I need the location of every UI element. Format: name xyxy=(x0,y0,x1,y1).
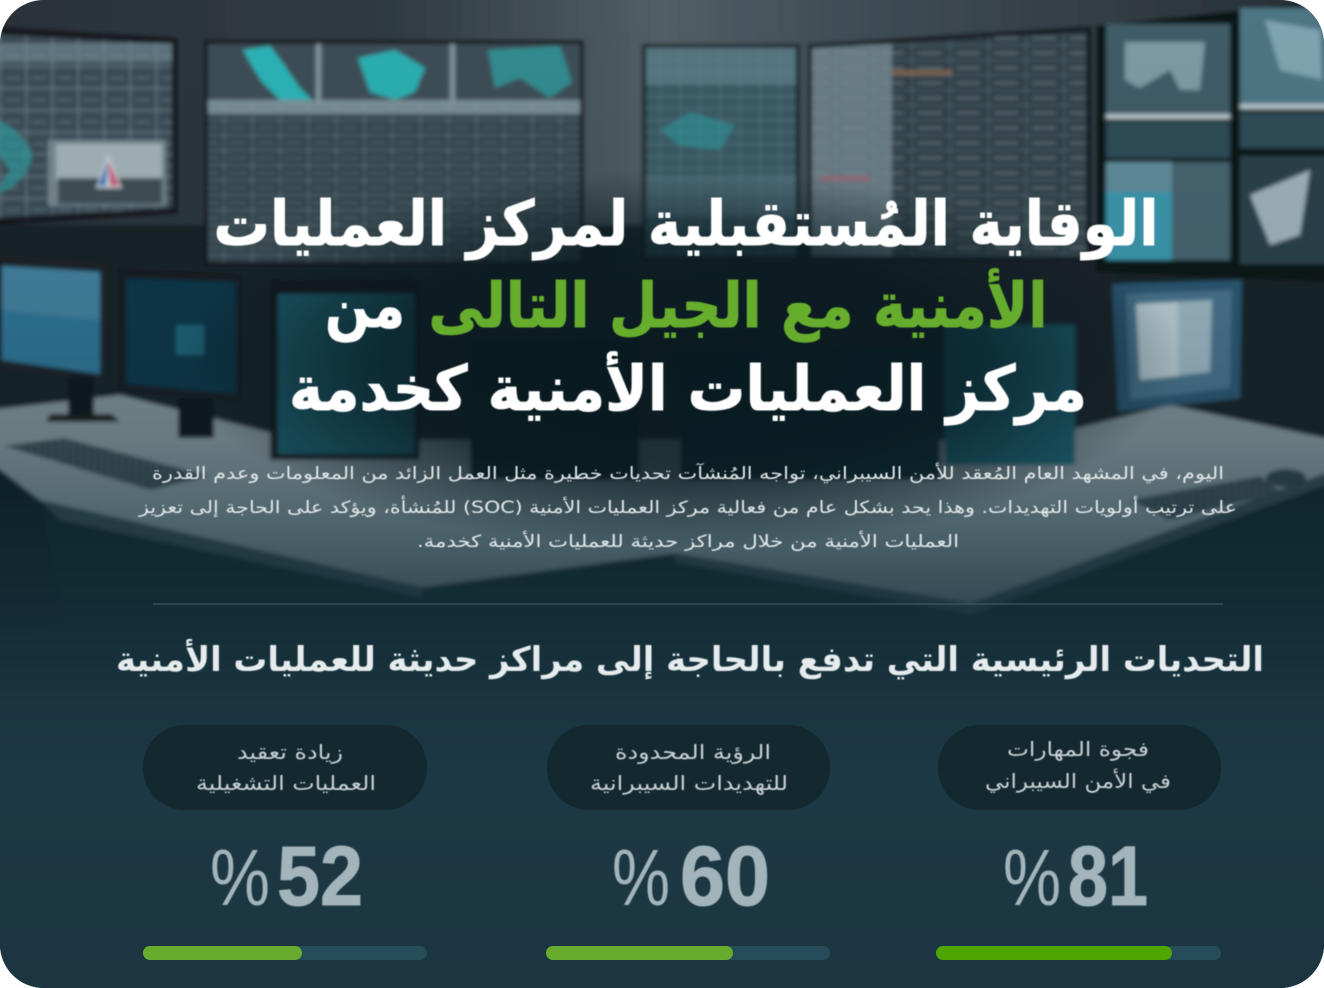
percentage value xyxy=(1003,829,1148,923)
pill label: زيادة تعقيد xyxy=(237,740,343,764)
percentage value xyxy=(210,829,363,923)
wall monitor: right videowall xyxy=(1096,0,1324,282)
pill label: فجوة المهارات xyxy=(1007,737,1149,761)
desk surface xyxy=(0,395,1324,603)
divider xyxy=(153,603,1223,605)
percentage value: % xyxy=(210,833,270,922)
progress bar xyxy=(936,946,1221,960)
desk monitor: centre left xyxy=(270,280,420,460)
pill label xyxy=(143,725,427,810)
pill label: في الأمن السيبراني xyxy=(985,769,1171,794)
wall monitor: centre right data xyxy=(808,26,1092,262)
pill label xyxy=(547,725,830,810)
desk monitor: left xyxy=(118,268,242,438)
percentage value xyxy=(612,829,770,923)
percentage value: 60 xyxy=(680,829,770,923)
title line 1: الوقاية المُستقبلية لمركز العمليات xyxy=(214,187,1158,260)
wall monitor: centre left with maps xyxy=(204,40,584,266)
stat: 60% limited visibility xyxy=(546,725,830,960)
desk monitor: far left xyxy=(0,254,120,422)
desk monitor: right xyxy=(1112,280,1242,412)
section heading: التحديات الرئيسية التي تدفع بالحاجة إلى مراكز حديثة للعمليات الأمنية xyxy=(116,638,1264,680)
title line 3: مركز العمليات الأمنية كخدمة xyxy=(289,351,1087,425)
title xyxy=(214,187,1158,425)
percentage value: 52 xyxy=(277,829,363,923)
title line 2 green highlight: الأمنية مع الجيل التالى xyxy=(428,268,1048,342)
percentage value: % xyxy=(612,833,670,922)
wall monitor: centre xyxy=(642,44,800,260)
intro paragraph xyxy=(138,462,1237,552)
paragraph line 2: على ترتيب أولويات التهديدات. وهذا يحد بشكل عام من فعالية مركز العمليات الأمنية (SOC) للمُنشأة، ويؤكد على الحاجة إلى تعزيز xyxy=(138,495,1237,518)
desk monitor: centre xyxy=(470,325,1075,480)
percentage value: % xyxy=(1003,833,1061,922)
stat: 52% operational complexity xyxy=(143,725,427,960)
pill label xyxy=(938,725,1221,810)
chair shadow xyxy=(0,462,65,650)
pill label: الرؤية المحدودة xyxy=(615,740,771,764)
wall monitor: left xyxy=(0,26,178,226)
progress bar xyxy=(143,946,427,960)
paragraph line 3: العمليات الأمنية من خلال مراكز حديثة للعمليات الأمنية كخدمة. xyxy=(417,531,959,552)
paragraph line 1: اليوم، في المشهد العام المُعقد للأمن السيبراني، تواجه المُنشآت تحديات خطيرة مثل العمل الزائد من المعلومات وعدم القدرة xyxy=(152,462,1224,484)
percentage value: 81 xyxy=(1068,829,1148,923)
stat: 81% skills gap xyxy=(936,725,1221,960)
pill label: للتهديدات السيبرانية xyxy=(590,771,788,795)
keyboards xyxy=(4,438,1306,520)
progress bar xyxy=(546,946,830,960)
pill label: العمليات التشغيلية xyxy=(196,771,376,795)
title line 2 white word: من xyxy=(325,269,405,342)
